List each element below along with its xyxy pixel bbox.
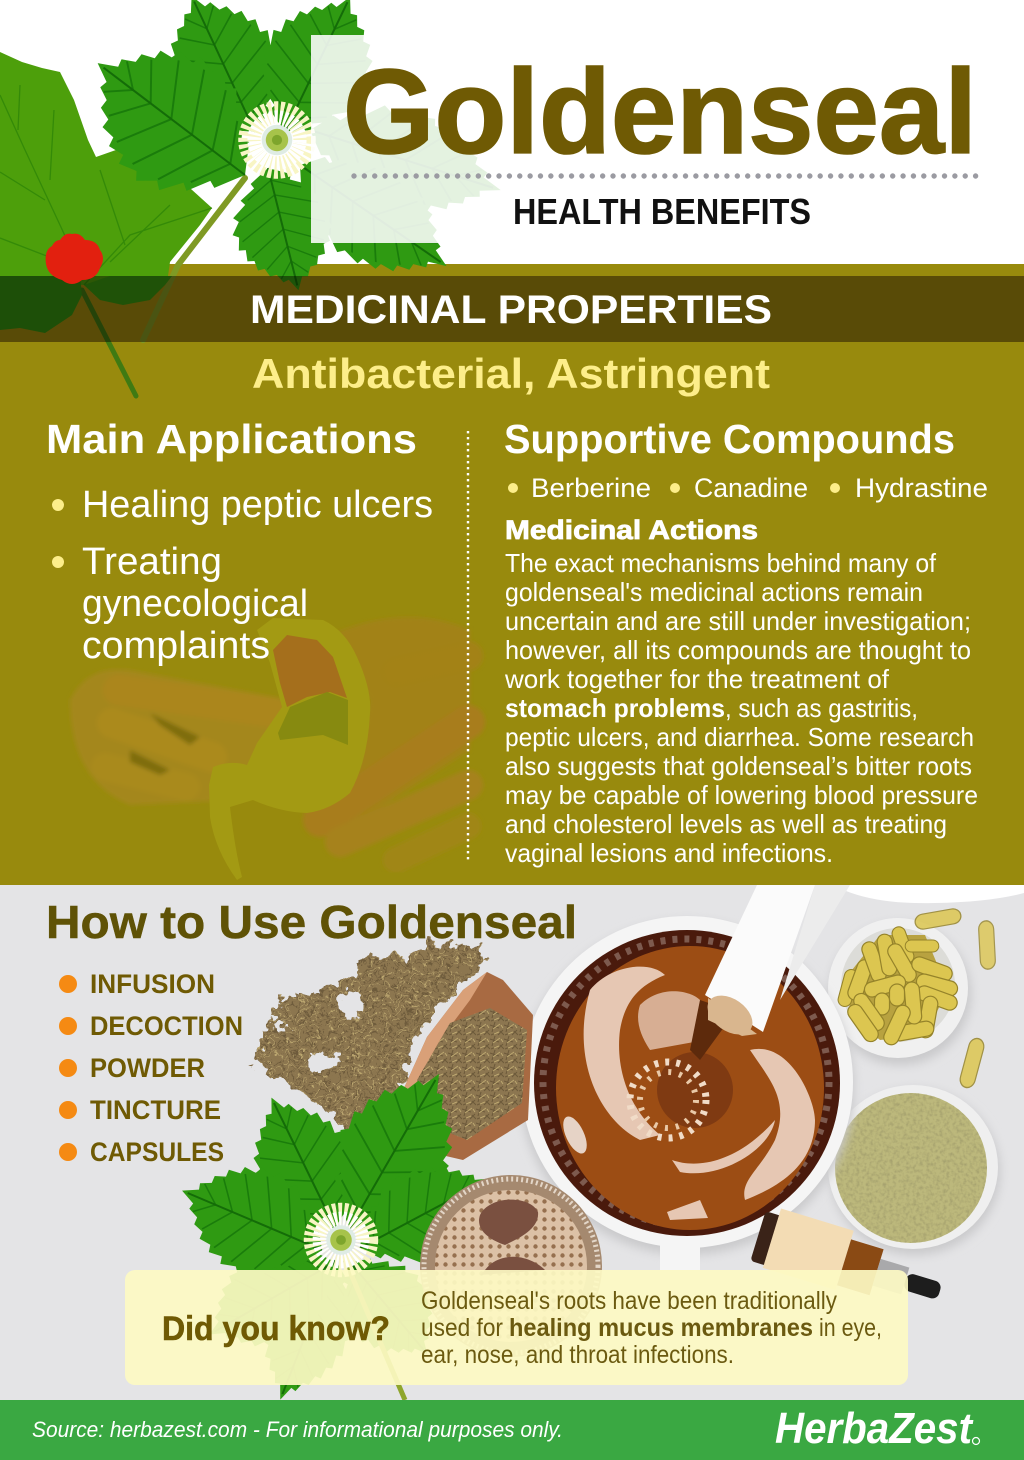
- heading: supportive compounds: Supportive Compounds: [504, 416, 955, 462]
- image: shaded lower leaf lobes: [0, 276, 172, 333]
- usage forms list: INFUSION: [90, 969, 215, 999]
- applications list: [52, 484, 433, 667]
- usage forms list: DECOCTION: [90, 1011, 243, 1041]
- applications list: Treating: [82, 541, 222, 583]
- stray capsules: [914, 908, 996, 1089]
- image: goldenseal plant with berry and flower: [0, 0, 516, 396]
- applications list: complaints: [82, 625, 270, 667]
- image: cup of frothy tea: [420, 1175, 602, 1357]
- medicinal actions paragraph: and cholesterol levels as well as treating: [505, 809, 947, 839]
- callout heading: Did you know?: [162, 1310, 390, 1348]
- heading: medicinal properties: MEDICINAL PROPERTIES: [250, 288, 772, 332]
- background white header: [0, 0, 1024, 264]
- image: bowl of powder: [828, 1085, 1000, 1255]
- panel: how to use background: [0, 885, 1024, 1400]
- properties text: Antibacterial, Astringent: [252, 350, 770, 397]
- medicinal actions paragraph: peptic ulcers, and diarrhea. Some research: [505, 722, 974, 752]
- translucent white title panel: [311, 35, 1024, 243]
- medicinal actions paragraph: uncertain and are still under investigation;: [505, 606, 971, 636]
- dotted divider under title: [354, 173, 976, 179]
- applications list: Healing peptic ulcers: [82, 484, 433, 526]
- footer: [0, 1400, 1024, 1460]
- source note: Source: herbazest.com - For informational purposes only.: [32, 1417, 563, 1442]
- usage forms list: TINCTURE: [90, 1095, 221, 1125]
- medicinal actions paragraph: vaginal lesions and infections.: [505, 838, 833, 868]
- subtitle: HEALTH BENEFITS: [513, 191, 811, 232]
- medicinal actions paragraph: however, all its compounds are thought to: [505, 635, 971, 665]
- compounds list: Canadine: [694, 473, 808, 503]
- compounds list: [508, 473, 988, 503]
- medicinal actions paragraph: The exact mechanisms behind many of: [505, 548, 937, 578]
- callout text: ear, nose, and throat infections.: [421, 1341, 734, 1369]
- panel: supportive compounds: [504, 416, 988, 868]
- callout text: in eye,: [819, 1314, 882, 1342]
- medicinal actions paragraph: work together for the treatment of: [504, 664, 890, 694]
- callout text: used for: [421, 1314, 503, 1342]
- medicinal actions paragraph: stomach problems: [505, 693, 725, 723]
- image: hands holding stomach model: [70, 617, 470, 880]
- image: goldenseal plant lower: [161, 1045, 512, 1416]
- image: dried goldenseal root and wooden scoop: [252, 943, 533, 1160]
- heading: how to use goldenseal: How to Use Goldenseal: [46, 896, 577, 948]
- medicinal actions paragraph: may be capable of lowering blood pressure: [505, 780, 978, 810]
- callout text: Goldenseal's roots have been traditionally: [421, 1287, 837, 1315]
- callout text: [421, 1287, 882, 1369]
- compounds list: Hydrastine: [855, 473, 988, 503]
- applications list: gynecological: [82, 583, 308, 625]
- medicinal actions paragraph: [504, 548, 978, 868]
- usage forms list: [59, 969, 243, 1167]
- image: dropper bottle: [750, 1204, 949, 1319]
- logo: HerbaZest: HerbaZest: [775, 1404, 974, 1453]
- callout text: healing mucus membranes: [509, 1314, 813, 1342]
- medicinal actions paragraph: , such as gastritis,: [725, 693, 918, 723]
- medicinal actions paragraph: also suggests that goldenseal’s bitter roots: [505, 751, 972, 781]
- stomach model: [209, 618, 370, 880]
- image: red berry: [46, 234, 103, 284]
- callout: did you know: [125, 1270, 908, 1385]
- heading: main applications: Main Applications: [46, 416, 417, 462]
- image: large cup of tea: [520, 885, 854, 1270]
- image: teapot body: [833, 885, 1024, 903]
- compounds list: Berberine: [531, 473, 651, 503]
- title: Goldenseal: [343, 45, 977, 179]
- image: bowl of capsules: [828, 918, 971, 1065]
- heading: medicinal actions: Medicinal Actions: [505, 515, 758, 545]
- medicinal actions paragraph: goldenseal's medicinal actions remain: [505, 577, 923, 607]
- panel: main applications: [46, 416, 433, 667]
- panel: medicinal properties olive background: [0, 264, 1024, 885]
- usage forms list: POWDER: [90, 1053, 205, 1083]
- usage forms list: CAPSULES: [90, 1137, 224, 1167]
- dark band: medicinal properties: [0, 276, 1024, 342]
